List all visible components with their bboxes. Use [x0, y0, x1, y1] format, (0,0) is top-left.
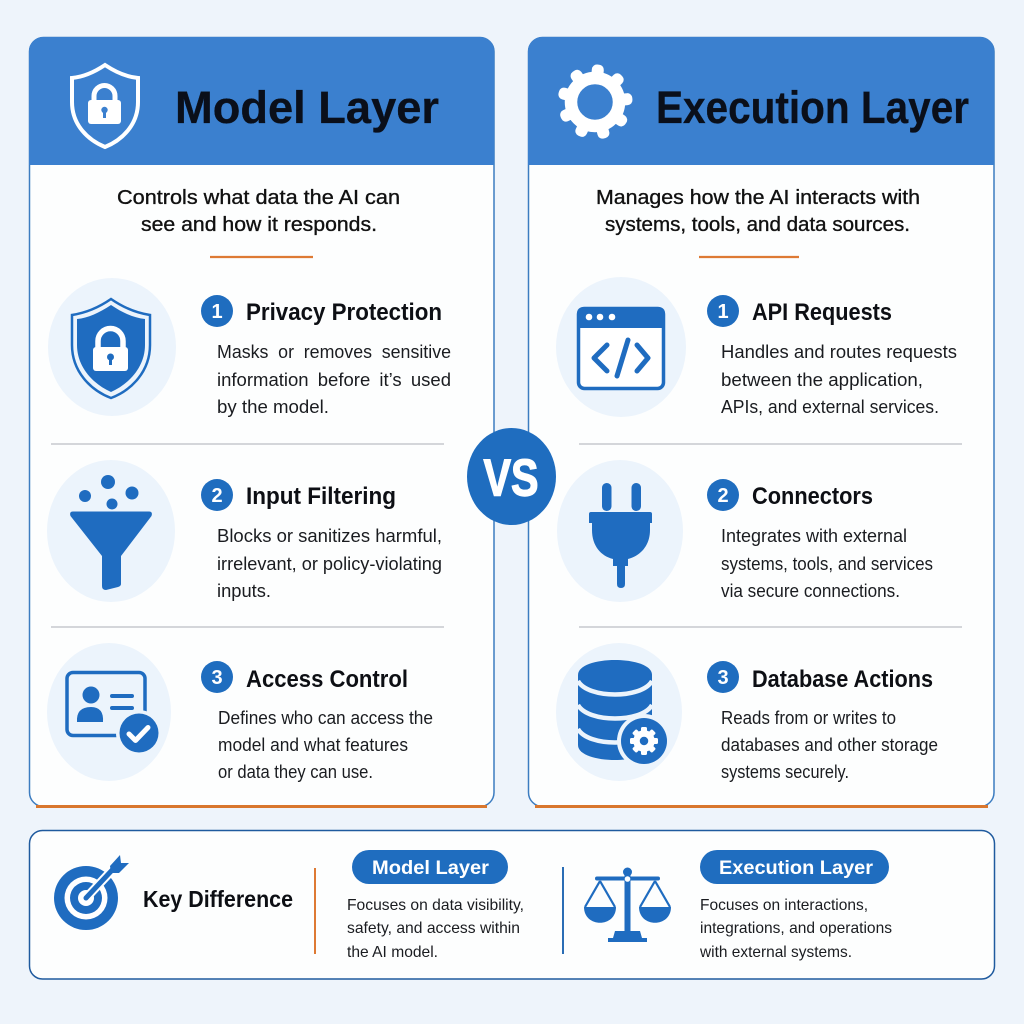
intro text: model layer: see and how it responds.	[141, 214, 377, 236]
model layer summary	[347, 850, 524, 961]
item description	[721, 525, 933, 601]
icon: shield with lock	[48, 278, 176, 416]
number badge 1	[707, 295, 739, 327]
item description: Masks or removes sensitive	[217, 341, 451, 362]
number badge 2	[201, 479, 233, 511]
icon: plug	[557, 460, 683, 602]
pill: model layer	[352, 850, 508, 884]
summary text: model layer: Focuses on data visibility,	[347, 897, 524, 914]
icon: code window	[556, 277, 686, 417]
item description	[721, 707, 938, 782]
item title: Database Actions	[752, 666, 933, 693]
header: model layer	[29, 37, 494, 165]
vs badge	[467, 428, 556, 525]
item description: or data they can use.	[218, 761, 373, 782]
item description: systems, tools, and services	[721, 553, 933, 574]
item description: inputs.	[217, 580, 271, 601]
summary text: model layer: the AI model.	[347, 944, 438, 961]
number badge 2: 2	[211, 485, 223, 507]
icon: funnel	[47, 460, 175, 602]
summary text: model layer: safety, and access within	[347, 920, 520, 937]
item: api requests	[556, 277, 957, 417]
item description: systems securely.	[721, 761, 849, 782]
panel: key difference	[30, 830, 994, 979]
icon: header shield with lock	[72, 65, 138, 147]
number badge 2	[707, 479, 739, 511]
summary text: execution layer: integrations, and operations	[700, 920, 892, 937]
number badge 3	[201, 661, 233, 693]
item: privacy protection	[48, 278, 451, 417]
number badge 1	[201, 295, 233, 327]
intro text: execution layer: systems, tools, and data sources.	[605, 214, 910, 236]
intro text: model layer	[117, 187, 400, 236]
item title: Connectors	[752, 483, 873, 510]
intro text: execution layer: Manages how the AI interacts with	[596, 187, 920, 209]
item description: by the model.	[217, 396, 329, 417]
icon: balance scale	[584, 868, 671, 942]
number badge 2: 2	[717, 485, 729, 507]
number badge 1: 1	[717, 301, 729, 323]
item title: API Requests	[752, 299, 892, 326]
item: input filtering	[47, 460, 442, 602]
item description: via secure connections.	[721, 580, 900, 601]
item title: Access Control	[246, 666, 408, 693]
item description: Handles and routes requests	[721, 341, 957, 362]
item description	[218, 707, 433, 782]
item description: between the application,	[721, 369, 923, 390]
pill: execution layer: Execution Layer	[719, 857, 873, 879]
vs badge: VS	[484, 450, 538, 508]
icon: id card with check	[47, 643, 171, 781]
icon: target with arrow	[54, 855, 129, 930]
item description: Defines who can access the	[218, 707, 433, 728]
item description: irrelevant, or policy-violating	[217, 553, 442, 574]
item description: Integrates with external	[721, 525, 907, 546]
item: database actions	[556, 643, 938, 782]
summary text: execution layer	[699, 897, 892, 961]
heading: model layer: Model Layer	[175, 82, 439, 133]
pill: model layer: Model Layer	[372, 857, 489, 879]
icon: header gear	[557, 64, 633, 140]
intro text: model layer: Controls what data the AI can	[117, 187, 400, 209]
summary text: model layer	[347, 897, 524, 961]
item description: model and what features	[218, 734, 408, 755]
item description: databases and other storage	[721, 734, 938, 755]
item title: Input Filtering	[246, 483, 396, 510]
item description: Blocks or sanitizes harmful,	[217, 525, 442, 546]
key difference heading: Key Difference	[143, 886, 293, 912]
header: execution layer	[528, 37, 994, 165]
panel: execution layer	[528, 37, 994, 806]
item description	[217, 525, 442, 601]
summary text: execution layer: with external systems.	[699, 944, 852, 961]
execution layer summary	[699, 850, 892, 961]
number badge 1: 1	[211, 301, 223, 323]
summary text: execution layer: Focuses on interactions,	[700, 897, 868, 914]
panel: model layer	[29, 37, 494, 806]
item description: Reads from or writes to	[721, 707, 896, 728]
number badge 3: 3	[211, 667, 223, 689]
item: access control	[47, 643, 433, 782]
item description	[217, 341, 451, 417]
item description	[721, 341, 957, 417]
icon: database with gear	[556, 643, 682, 781]
item description: information before it’s used	[217, 369, 451, 390]
item title: Privacy Protection	[246, 299, 442, 326]
number badge 3	[707, 661, 739, 693]
pill: execution layer	[700, 850, 889, 884]
item: connectors	[557, 460, 933, 602]
number badge 3: 3	[717, 667, 729, 689]
intro text: execution layer	[596, 187, 920, 236]
item description: APIs, and external services.	[721, 396, 939, 417]
heading: execution layer: Execution Layer	[656, 82, 969, 133]
